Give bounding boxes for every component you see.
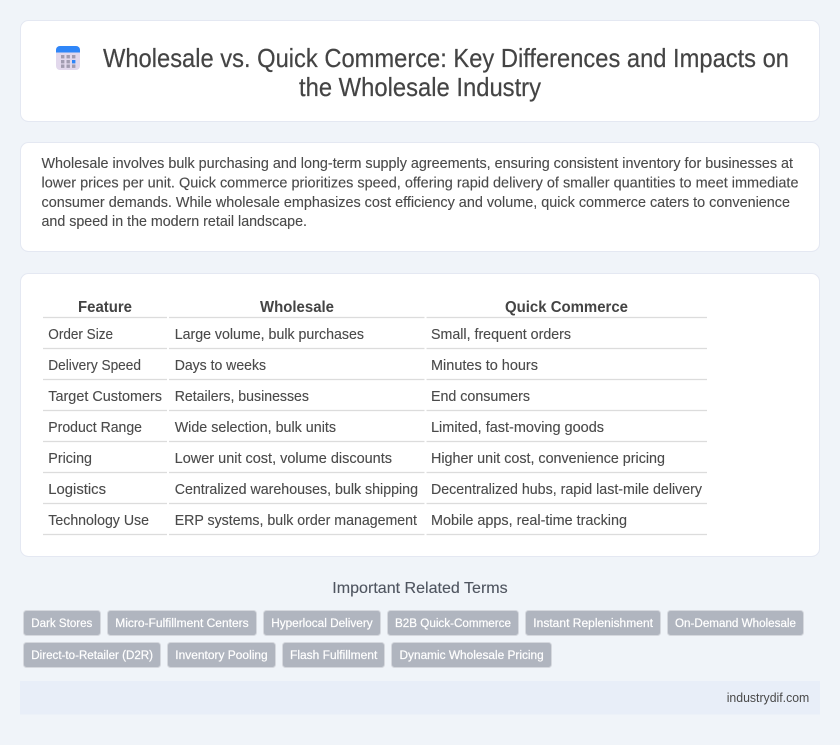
table header: Feature (78, 299, 132, 316)
table header (78, 299, 628, 316)
chip: on-demand wholesale (668, 610, 804, 636)
chip: b2b quick-commerce (388, 610, 518, 636)
text block: summary paragraph (42, 156, 799, 230)
chip: hyperlocal delivery: Hyperlocal Delivery (271, 616, 374, 630)
chip: dark stores: Dark Stores (31, 616, 92, 630)
table row: technology use: Mobile apps, real-time tracking (431, 513, 627, 529)
table row: logistics: Decentralized hubs, rapid last-mile delivery (431, 482, 703, 498)
chip: dark stores (24, 610, 100, 636)
table row: product range: Limited, fast-moving goods (431, 420, 604, 436)
chip: inventory pooling: Inventory Pooling (175, 648, 268, 662)
text block: summary paragraph: lower prices per unit. Quick commerce prioritizes speed, offering rapid delivery of smaller quantities to meet immediate (42, 176, 799, 192)
chip: micro-fulfillment centers: Micro-Fulfillment Centers (115, 616, 249, 630)
table row: order size: Large volume, bulk purchases (175, 327, 364, 343)
chip: flash fulfillment (282, 642, 384, 668)
table row: technology use: ERP systems, bulk order management (175, 513, 417, 529)
table row: pricing: Pricing (48, 451, 92, 467)
table row: pricing (48, 451, 665, 467)
table row: order size: Small, frequent orders (431, 327, 571, 343)
related term chips (24, 610, 804, 668)
chip: b2b quick-commerce: B2B Quick-Commerce (395, 616, 511, 630)
table row: technology use (48, 513, 627, 529)
table row: delivery speed: Minutes to hours (431, 358, 538, 374)
table row: product range: Wide selection, bulk units (175, 420, 336, 436)
chip: direct-to-retailer: Direct-to-Retailer (D2R) (31, 648, 153, 662)
text block: summary paragraph: consumer demands. While wholesale emphasizes cost efficiency and volume, quick commerce caters to convenience (42, 195, 790, 211)
table row: logistics (48, 482, 703, 498)
text block: summary paragraph: Wholesale involves bulk purchasing and long-term supply agreements, ensuring consistent inventory for businesses at (42, 156, 793, 172)
chip: on-demand wholesale: On-Demand Wholesale (675, 616, 796, 630)
table row: target customers (48, 389, 530, 405)
table row: order size (48, 327, 571, 343)
chip: micro-fulfillment centers (108, 610, 256, 636)
footer bar (20, 681, 820, 714)
chip: flash fulfillment: Flash Fulfillment (290, 648, 378, 662)
title: the Wholesale Industry (299, 74, 541, 102)
chip: inventory pooling (168, 642, 276, 668)
table header: Quick Commerce (505, 299, 628, 316)
table row: order size: Order Size (48, 327, 113, 343)
table row: delivery speed: Days to weeks (175, 358, 266, 374)
heading: important related terms: Important Related Terms (332, 580, 508, 597)
chip: instant replenishment: Instant Replenishment (533, 616, 654, 630)
table row: target customers: Retailers, businesses (175, 389, 309, 405)
table row: product range (48, 420, 604, 436)
table row: target customers: Target Customers (48, 389, 162, 405)
table row: pricing: Higher unit cost, convenience pricing (431, 451, 665, 467)
panel: title card (20, 20, 820, 122)
chip: dynamic wholesale pricing: Dynamic Wholesale Pricing (400, 648, 544, 662)
table row: target customers: End consumers (431, 389, 530, 405)
chip: dynamic wholesale pricing (392, 642, 552, 668)
table row: logistics: Centralized warehouses, bulk shipping (175, 482, 418, 498)
panel: summary (20, 142, 820, 252)
table row: delivery speed: Delivery Speed (48, 358, 141, 374)
title (103, 45, 789, 102)
icon: calendar (56, 46, 80, 70)
chip: direct-to-retailer (24, 642, 160, 668)
chip: hyperlocal delivery (264, 610, 380, 636)
chip: instant replenishment (526, 610, 660, 636)
table row: delivery speed (48, 358, 538, 374)
table row: technology use: Technology Use (48, 513, 149, 529)
title: Wholesale vs. Quick Commerce: Key Differences and Impacts on (103, 45, 789, 73)
panel: comparison table (20, 274, 820, 556)
table header: Wholesale (260, 299, 334, 316)
table row: logistics: Logistics (48, 482, 106, 498)
footer source text: industrydif.com (727, 690, 809, 705)
table row: pricing: Lower unit cost, volume discounts (175, 451, 392, 467)
text block: summary paragraph: and speed in the modern retail landscape. (42, 214, 307, 230)
table row: product range: Product Range (48, 420, 142, 436)
